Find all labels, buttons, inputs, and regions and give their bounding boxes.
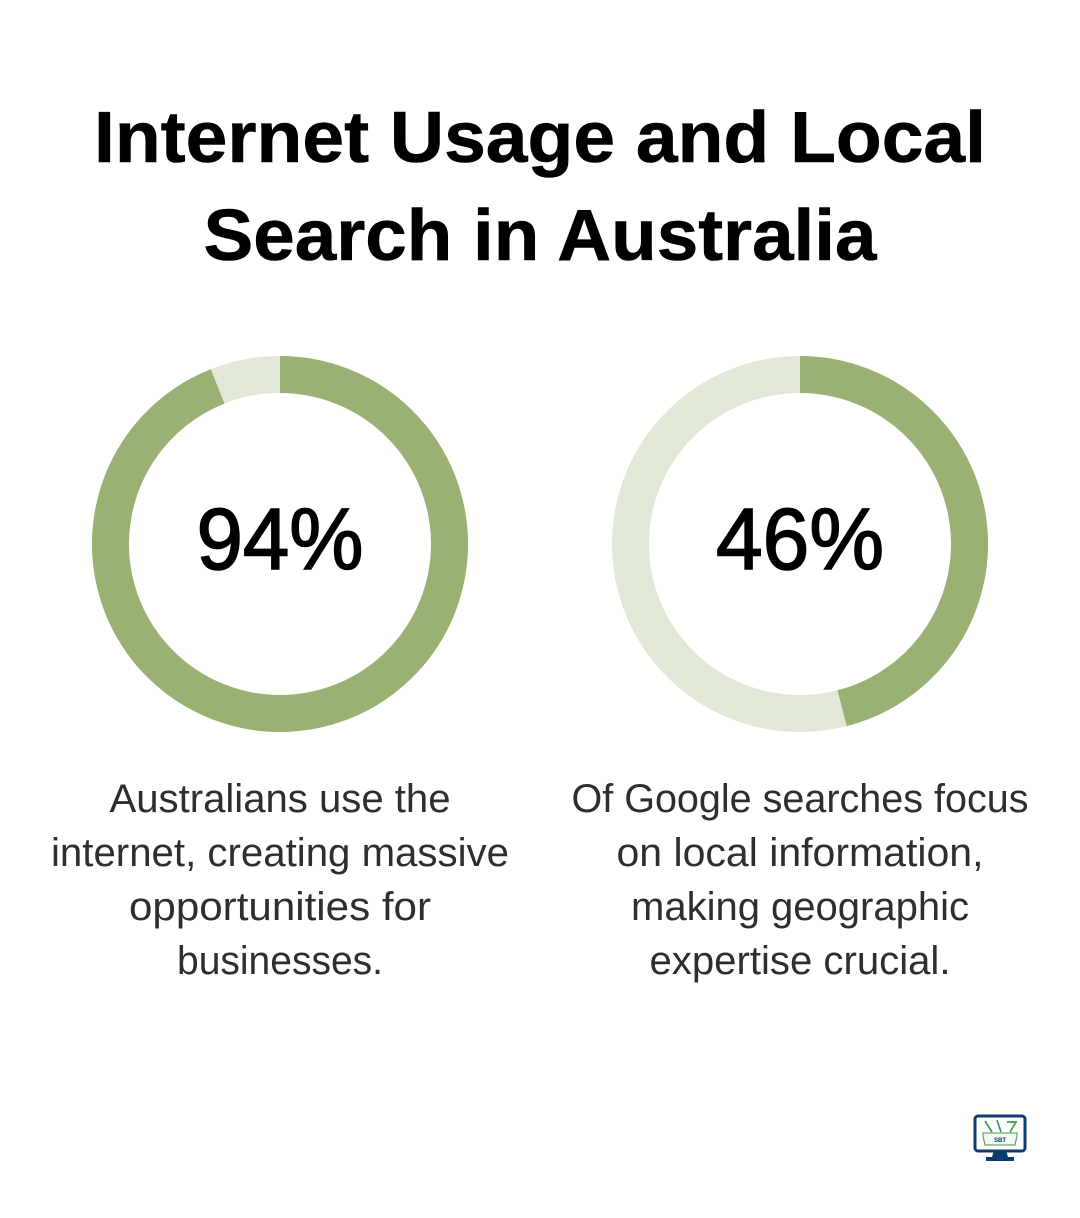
description: local search xyxy=(572,777,1028,983)
stat: 46%: 46% xyxy=(716,491,884,588)
donut chart: 46% xyxy=(630,374,970,714)
description: internet use: internet, creating massive xyxy=(51,831,509,875)
description: internet use: businesses. xyxy=(177,939,383,983)
icon: SBT monitor logo xyxy=(975,1116,1025,1161)
icon: SBT monitor logo: SBT xyxy=(994,1138,1006,1144)
description: local search: on local information, xyxy=(616,831,984,875)
description: internet use: Australians use the xyxy=(110,777,450,821)
description: local search: Of Google searches focus xyxy=(572,777,1028,821)
title: Internet Usage and Local xyxy=(94,98,986,178)
description: local search: expertise crucial. xyxy=(650,939,950,983)
donut chart: 94% xyxy=(110,374,450,714)
description: local search: making geographic xyxy=(631,885,969,929)
stat: 94%: 94% xyxy=(196,491,364,588)
panel: 46% local search xyxy=(572,374,1028,983)
description: internet use xyxy=(51,777,509,983)
title xyxy=(94,98,986,276)
description: internet use: opportunities for xyxy=(129,885,431,929)
title: Search in Australia xyxy=(204,196,877,276)
panel: 94% internet use xyxy=(51,374,509,983)
